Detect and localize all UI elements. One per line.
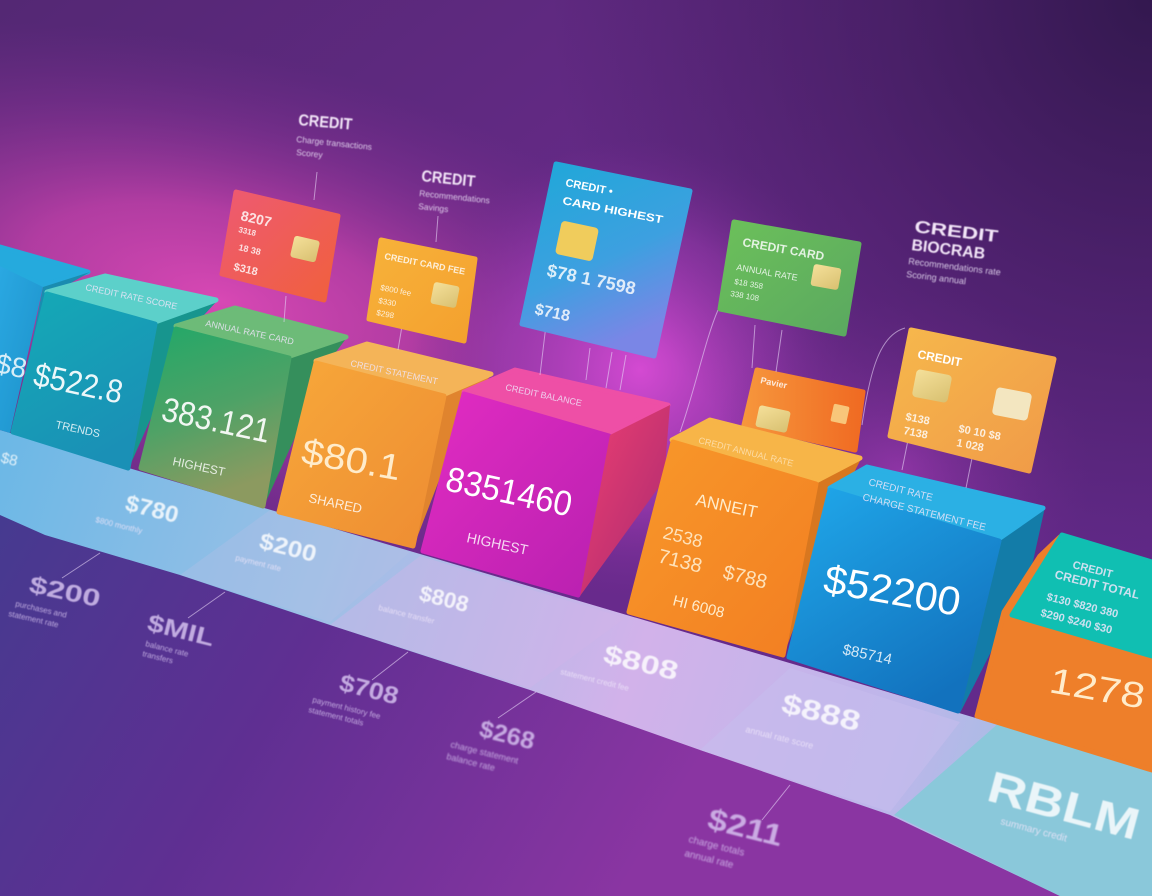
floor annotation 4: $268: [477, 716, 537, 755]
card text: [232, 207, 273, 278]
card text: $318: [232, 261, 259, 278]
card number: $718: [533, 301, 572, 325]
strip labels: summary credit: [999, 816, 1068, 845]
floor annotation 1: purchases and: [15, 599, 68, 620]
strip labels: $800 monthly: [95, 515, 143, 536]
chip: [555, 220, 599, 262]
card number: [533, 260, 637, 325]
caption: HIGHEST: [171, 454, 227, 479]
value: 8351460: [442, 460, 576, 524]
top label: CREDIT RATE SCORE: [85, 282, 178, 311]
card text: $298: [376, 308, 395, 320]
strip labels: $200: [257, 528, 319, 567]
card: blue: [522, 164, 690, 356]
value: 1278: [1047, 660, 1148, 717]
card: large orange: [890, 330, 1054, 471]
card: small orange behind block: [744, 370, 863, 450]
strip labels: payment rate: [235, 553, 283, 573]
card text: [376, 251, 466, 320]
annotation: credit left: [296, 112, 372, 160]
card text: CREDIT CARD FEE: [384, 251, 466, 277]
annotation: credit left: CREDIT: [298, 112, 353, 134]
label: [1039, 559, 1141, 637]
strip labels: statement credit fee: [560, 667, 630, 693]
floor annotation 5: charge totals: [687, 834, 745, 859]
block: bright orange: [629, 420, 862, 657]
block: orange and teal right: [977, 535, 1152, 770]
floor annotation 3: $708: [337, 670, 401, 710]
card number: $78 1 7598: [545, 260, 637, 299]
floor annotation 2: transfers: [142, 649, 174, 665]
connector lines: [62, 172, 972, 820]
block: light blue: [0, 247, 90, 434]
floor annotation 4: balance rate: [446, 751, 496, 773]
floor annotation 3: payment history fee: [312, 695, 382, 721]
chip: [290, 235, 320, 263]
floor strip: [0, 430, 1152, 896]
chips: [912, 369, 1032, 421]
card heading: [561, 177, 664, 226]
card text: 338 108: [730, 289, 760, 303]
annotation: credit centre: Recommendations: [419, 188, 490, 205]
annotation: credit report: [906, 217, 1001, 286]
floor annotation 1: statement rate: [8, 609, 60, 630]
floor annotation 1: [8, 571, 103, 630]
floor annotation 5: annual rate: [683, 848, 735, 871]
values: 2538: [661, 522, 705, 552]
strip labels: $808: [601, 639, 682, 686]
card text: 3318: [238, 225, 257, 238]
label: CREDIT: [1071, 559, 1114, 581]
annotation: credit report: Recommendations rate: [908, 256, 1001, 277]
value: 383.121: [158, 391, 274, 451]
top label: CHARGE STATEMENT FEE: [861, 492, 987, 534]
strip labels: $888: [779, 688, 864, 737]
strip labels: $780: [123, 490, 181, 528]
floor annotation 4: charge statement: [450, 739, 520, 766]
card: green: [720, 222, 859, 334]
values: $788: [721, 562, 769, 594]
annotation: credit left: Scorey: [296, 147, 324, 160]
chip: [810, 264, 842, 290]
values: [656, 522, 769, 594]
card text: $800 fee: [380, 283, 412, 298]
floor annotation 1: $200: [27, 571, 103, 613]
floor annotation 4: [446, 716, 537, 773]
card text: 7138: [902, 425, 929, 442]
card heading: CARD HIGHEST: [561, 195, 664, 226]
top label: CREDIT BALANCE: [505, 382, 583, 408]
card text: $18 358: [734, 277, 764, 291]
values: 7138: [656, 546, 704, 578]
top label: CREDIT RATE: [867, 477, 934, 504]
card: small orange behind block: Pavier: [760, 375, 789, 391]
card: red: [222, 192, 338, 300]
label: CREDIT TOTAL: [1053, 567, 1141, 602]
card text: $138: [904, 411, 931, 428]
heading: ANNEIT: [694, 490, 759, 522]
card text: $330: [378, 296, 397, 308]
card text: ANNUAL RATE: [736, 262, 798, 283]
block: magenta: [423, 370, 670, 596]
floor annotation 2: [142, 610, 217, 665]
top label: ANNUAL RATE CARD: [205, 318, 295, 347]
block: blue: [789, 467, 1045, 713]
card text: CREDIT CARD: [741, 235, 826, 263]
label: $290 $240 $30: [1039, 607, 1113, 637]
card text: 1 028: [955, 437, 985, 454]
strip labels: $808: [417, 581, 471, 617]
caption: TRENDS: [54, 419, 101, 440]
annotation: credit centre: CREDIT: [421, 168, 476, 191]
label: $130 $820 380: [1045, 591, 1119, 621]
floor annotation 5: $211: [704, 803, 786, 853]
card text: 18 38: [238, 242, 262, 257]
card heading: CREDIT •: [564, 177, 614, 198]
floor annotation 3: statement totals: [308, 705, 365, 728]
strip labels: [0, 449, 1145, 850]
caption: HIGHEST: [465, 529, 530, 558]
caption: HI 6008: [671, 592, 726, 622]
caption: $85714: [841, 641, 894, 668]
strip labels: balance transfer: [378, 603, 436, 626]
annotation: credit centre: Savings: [418, 201, 449, 214]
annotation: credit report: CREDIT: [914, 217, 1000, 246]
value: $522.8: [31, 356, 126, 411]
floor annotation 2: $MIL: [145, 610, 217, 652]
floor annotation 2: balance rate: [145, 639, 190, 659]
annotation: credit report: BIOCRAB: [911, 237, 986, 263]
block: orange: [279, 344, 493, 548]
card text: 8207: [239, 207, 273, 230]
caption: SHARED: [307, 490, 363, 516]
annotation: credit left: Charge transactions: [296, 134, 372, 152]
value: $80.1: [299, 431, 404, 488]
floor annotation 3: [308, 670, 401, 728]
top label: CREDIT STATEMENT: [350, 358, 439, 387]
strip labels: RBLM: [982, 762, 1145, 850]
floor annotation 5: [683, 803, 786, 871]
annotation: credit centre: [418, 168, 490, 214]
card heading: CREDIT: [916, 347, 964, 370]
value: $52200: [820, 558, 964, 625]
strip labels: annual rate score: [745, 724, 814, 751]
annotation: credit report: Scoring annual: [906, 269, 967, 286]
block: green: [141, 308, 348, 508]
top label: CREDIT ANNUAL RATE: [698, 435, 794, 468]
card text: [902, 411, 1002, 454]
card text: [730, 235, 826, 303]
chip: [430, 282, 460, 308]
block: teal: [13, 276, 218, 470]
card text: $0 10 $8: [957, 423, 1002, 443]
card: orange: [369, 240, 475, 341]
